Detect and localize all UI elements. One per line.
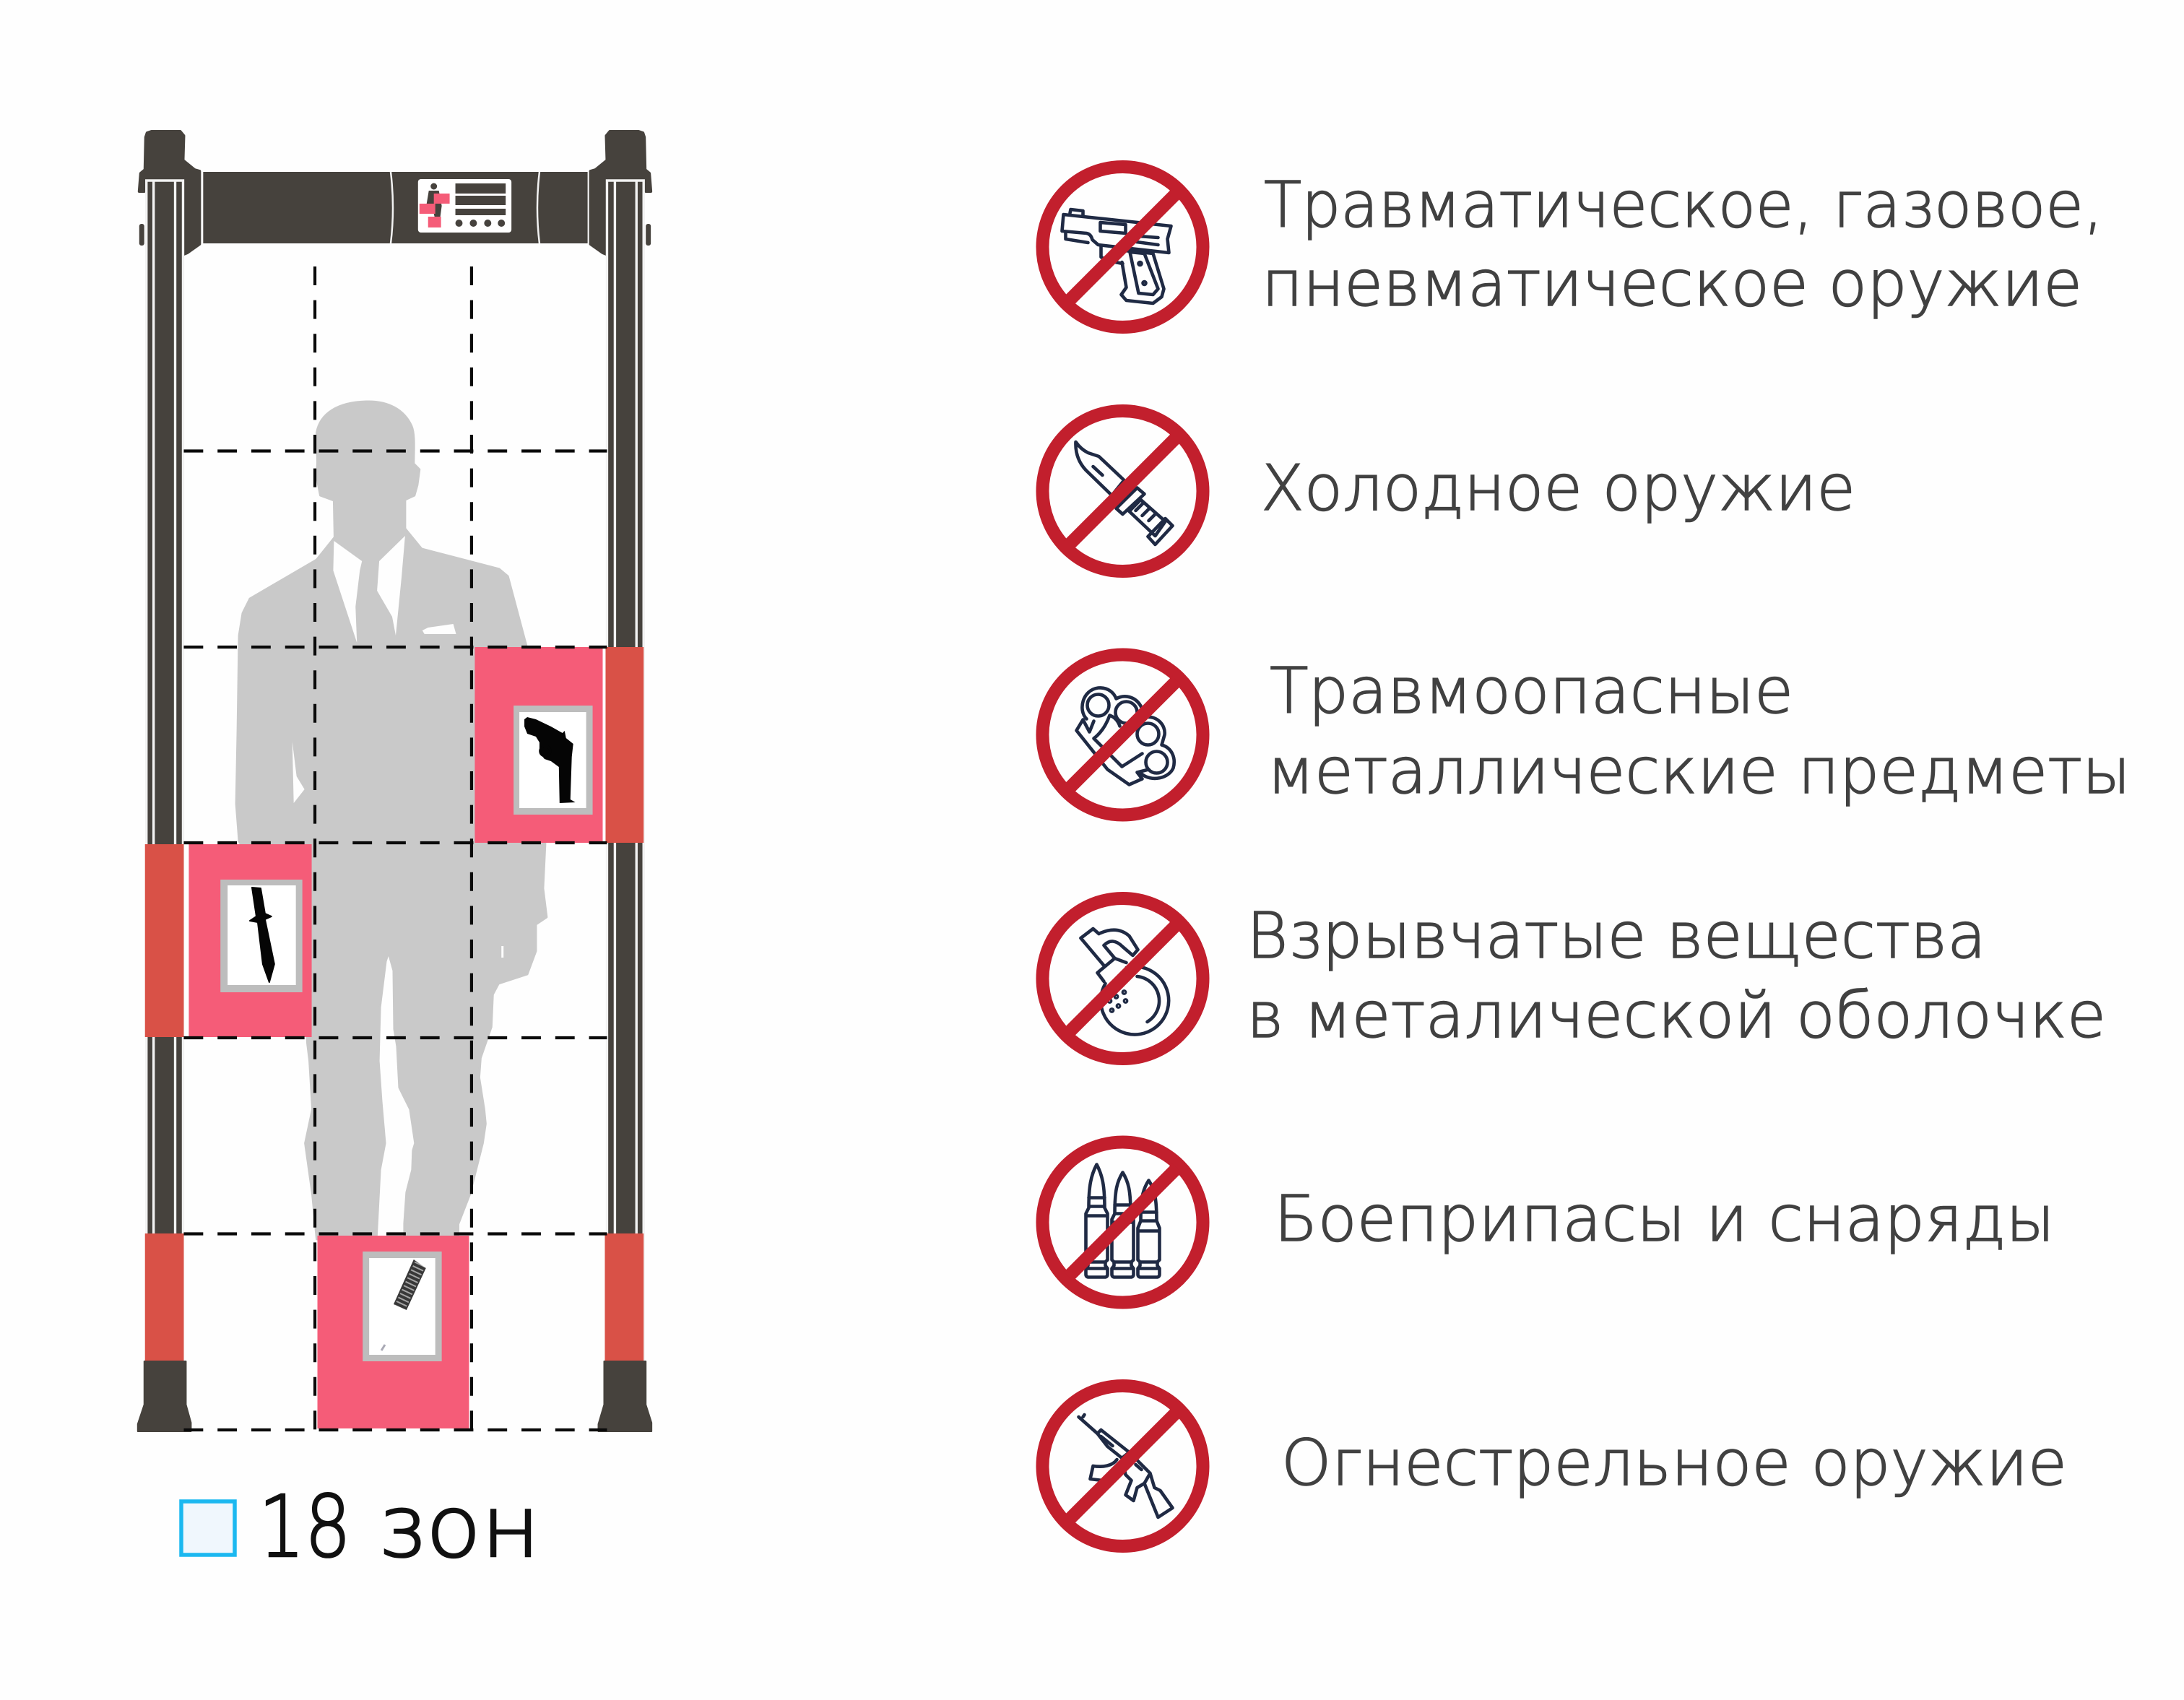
icon: revolver xyxy=(524,717,576,803)
label: Огнестрельное оружие xyxy=(1281,1426,2067,1500)
icon: no explosives xyxy=(1043,898,1203,1059)
panel: prohibited item 6 xyxy=(1043,1386,2067,1546)
label: Взрывчатые вещества xyxy=(1247,899,1986,973)
panel: prohibited item 1 xyxy=(1043,167,2103,327)
label: металлические предметы xyxy=(1267,734,2131,808)
panel: prohibited item 5 xyxy=(1043,1142,2055,1303)
panel: prohibited item 4 xyxy=(1043,898,2106,1059)
legend swatch xyxy=(181,1501,235,1555)
label: Травматическое, газовое, xyxy=(1264,168,2103,242)
legend label: 18 xyxy=(259,1477,351,1577)
control panel display xyxy=(418,179,511,233)
icon: combat knife xyxy=(250,888,274,982)
person silhouette xyxy=(236,402,547,1239)
legend label: зон xyxy=(377,1477,540,1577)
label xyxy=(1262,168,2103,321)
label: пневматическое оружие xyxy=(1262,247,2082,321)
label: Боеприпасы и снаряды xyxy=(1274,1182,2055,1256)
label xyxy=(1247,899,2106,1052)
bottom red bands and feet xyxy=(138,1233,651,1431)
left pillar xyxy=(139,131,199,1361)
label: в металической оболочке xyxy=(1247,979,2106,1052)
top beam with control panel xyxy=(203,172,588,243)
label: Холодное оружие xyxy=(1261,451,1855,525)
icon: no brass knuckles xyxy=(1043,654,1203,815)
label xyxy=(1267,654,2131,808)
highlighted zone: knife, left side xyxy=(145,844,312,1037)
dashed zone grid xyxy=(183,266,607,1434)
highlighted zone: magazine, bottom centre xyxy=(318,1236,469,1428)
highlighted zone: revolver, right side xyxy=(474,647,644,843)
icon: no ammunition xyxy=(1043,1142,1203,1303)
legend: 18 zones xyxy=(181,1477,540,1577)
icon: no firearms xyxy=(1043,1386,1203,1546)
panel: prohibited item 3 xyxy=(1043,654,2131,815)
icon: magazine xyxy=(381,1259,426,1350)
icon: no knives xyxy=(1043,411,1203,571)
label: Травмоопасные xyxy=(1270,654,1793,728)
icon: no pistols xyxy=(1043,167,1203,327)
panel: detector gate diagram xyxy=(138,131,651,1434)
legend label xyxy=(259,1477,540,1577)
panel: prohibited item 2 xyxy=(1043,411,1855,571)
right pillar xyxy=(591,131,651,1361)
